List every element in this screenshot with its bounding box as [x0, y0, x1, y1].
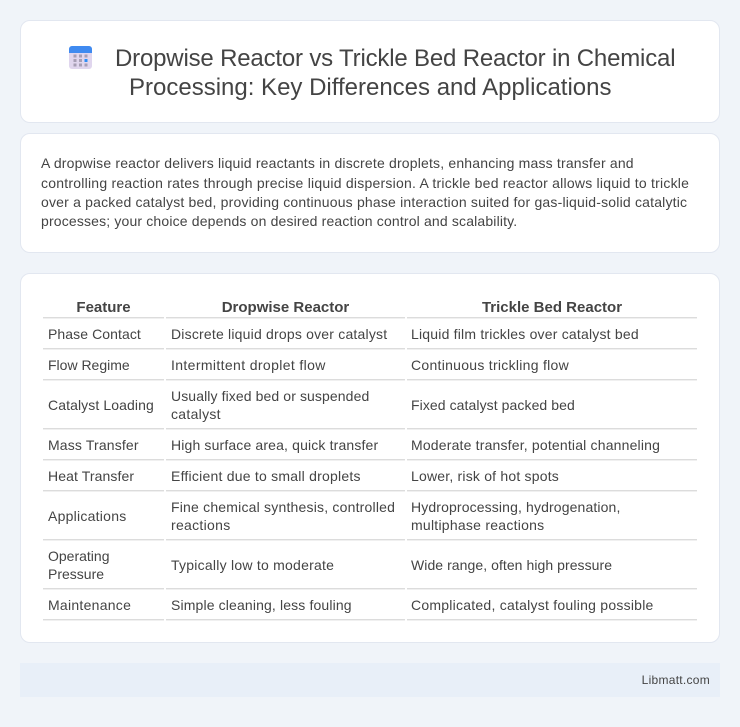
- table rows: [48, 326, 660, 613]
- table rows: Mass Transfer: [48, 437, 139, 453]
- table rows: Pressure: [48, 566, 104, 582]
- table rows: multiphase reactions: [411, 517, 544, 533]
- table rows: Complicated, catalyst fouling possible: [411, 597, 654, 613]
- table rows: Fine chemical synthesis, controlled: [171, 499, 395, 515]
- table rows: catalyst: [171, 406, 221, 422]
- table rows: Flow Regime: [48, 357, 130, 373]
- table rows: Catalyst Loading: [48, 397, 154, 413]
- title: Dropwise Reactor vs Trickle Bed Reactor in Chemical: [115, 45, 675, 72]
- comparison table panel: [20, 273, 720, 643]
- title: [115, 45, 675, 101]
- table rows: Maintenance: [48, 597, 131, 613]
- intro text panel: [20, 133, 720, 253]
- intro text panel: A dropwise reactor delivers liquid reactants in discrete droplets, enhancing mass transfer and: [41, 155, 634, 171]
- icon: calendar grid: [69, 46, 92, 69]
- table rows: Wide range, often high pressure: [411, 557, 612, 573]
- table rows: Fixed catalyst packed bed: [411, 397, 575, 413]
- table header: Trickle Bed Reactor: [482, 299, 622, 316]
- table rows: reactions: [171, 517, 231, 533]
- table rows: Simple cleaning, less fouling: [171, 597, 352, 613]
- table header: Feature: [76, 299, 131, 316]
- intro text panel: processes; your choice depends on desired reaction control and scalability.: [41, 213, 517, 229]
- table rows: Continuous trickling flow: [411, 357, 569, 373]
- table rows: Hydroprocessing, hydrogenation,: [411, 499, 620, 515]
- table rows: Lower, risk of hot spots: [411, 468, 559, 484]
- intro text panel: controlling reaction rates through precise liquid dispersion. A trickle bed reactor allows liquid to trickle: [41, 175, 689, 191]
- table rows: Applications: [48, 508, 126, 524]
- table rows: Liquid film trickles over catalyst bed: [411, 326, 639, 342]
- footer brand: Libmatt.com: [642, 673, 710, 687]
- table rows: Efficient due to small droplets: [171, 468, 361, 484]
- table rows: Typically low to moderate: [171, 557, 334, 573]
- table rows: Intermittent droplet flow: [171, 357, 326, 373]
- header panel: [20, 20, 720, 123]
- table rows: Moderate transfer, potential channeling: [411, 437, 660, 453]
- table rows: Usually fixed bed or suspended: [171, 388, 369, 404]
- table rows: Phase Contact: [48, 326, 141, 342]
- table rows: Operating: [48, 548, 109, 564]
- title: Processing: Key Differences and Applications: [129, 74, 612, 101]
- table rows: Discrete liquid drops over catalyst: [171, 326, 387, 342]
- table header: [76, 299, 622, 316]
- table rows: Heat Transfer: [48, 468, 134, 484]
- table rows: High surface area, quick transfer: [171, 437, 378, 453]
- table header: Dropwise Reactor: [222, 299, 349, 316]
- footer bar: [20, 663, 720, 697]
- intro text panel: over a packed catalyst bed, providing continuous phase interaction suited for gas-liquid-solid catalytic: [41, 194, 687, 210]
